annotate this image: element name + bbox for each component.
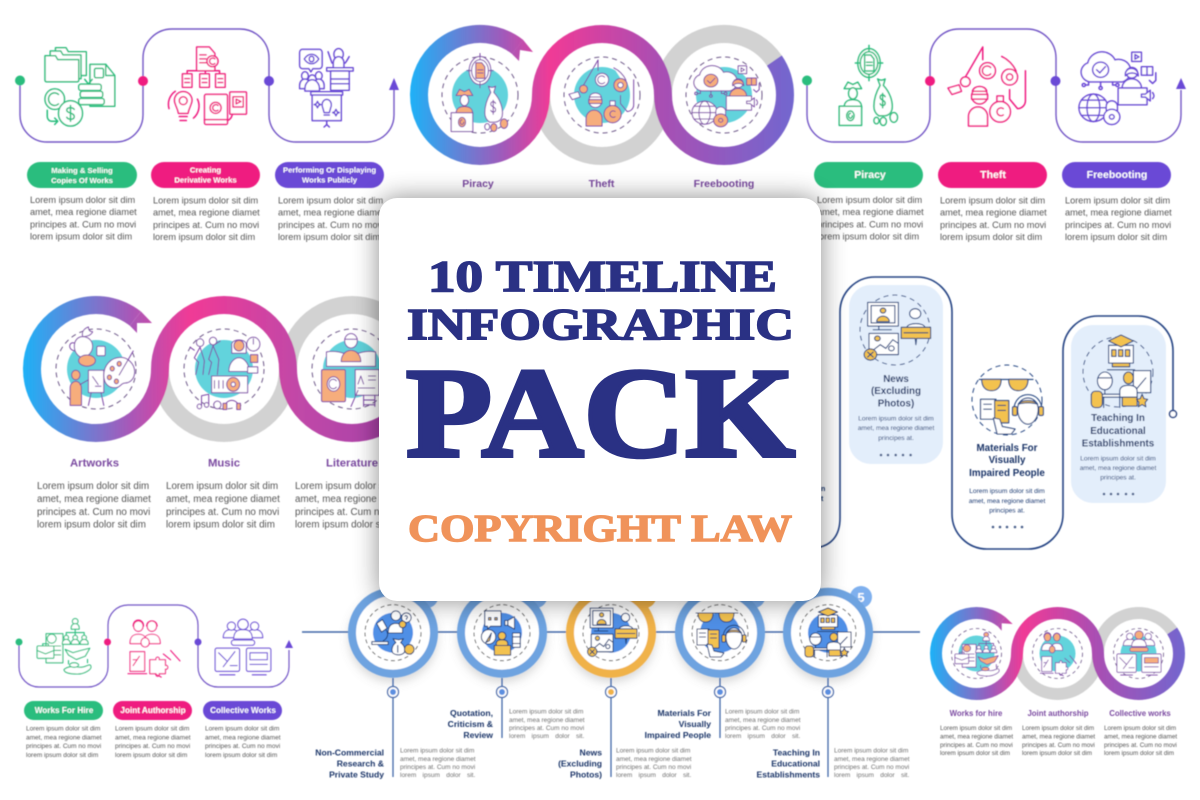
text block: column 2: principes at. Cum no movi bbox=[1022, 742, 1095, 749]
icon: joint authorship bbox=[1032, 628, 1082, 678]
label: collective works: Collective works bbox=[1109, 709, 1171, 718]
card: news: Lorem ipsum dolor sit dim bbox=[858, 416, 934, 422]
card: teaching in educational establishments: Teaching In bbox=[1091, 413, 1145, 424]
icon: derivative works bbox=[168, 47, 246, 124]
step 5: teaching in educational establishments bbox=[756, 586, 910, 780]
icon: collective works bbox=[215, 619, 271, 675]
text block: column 2: lorem ipsum dolor sit dim bbox=[115, 752, 187, 759]
icon: music bbox=[184, 329, 264, 409]
text block: column 1: principes at. Cum no movi bbox=[30, 219, 136, 229]
text block: column 2: lorem ipsum dolor sit dim bbox=[1022, 750, 1092, 757]
subtitle: copyright law: COPYRIGHT LAW bbox=[408, 508, 792, 550]
step 2: quotation, criticism and review: Lorem ipsum dolor sit dim bbox=[509, 708, 583, 716]
label: collective works: Collective Works bbox=[210, 706, 276, 715]
label: creating derivative works: Derivative Works bbox=[174, 176, 237, 184]
text block: column 1: amet, mea regione diamet bbox=[30, 207, 137, 217]
text block: column 2: Lorem ipsum dolor sit dim bbox=[940, 196, 1046, 206]
step 1: non-commercial research: Research & bbox=[337, 758, 384, 768]
card: teaching in educational establishments: principes at. bbox=[1100, 474, 1136, 482]
text block: column 1: lorem ipsum dolor sit dim bbox=[30, 232, 132, 242]
text block: column 2: principes at. Cum no movi bbox=[166, 507, 279, 518]
title line: infographic: INFOGRAPHIC bbox=[407, 300, 794, 349]
step 2: quotation, criticism and review: Quotation, bbox=[450, 708, 493, 718]
icon: copies of works bbox=[45, 48, 115, 126]
step 3: news: Photos) bbox=[570, 770, 602, 780]
label: piracy pill: Piracy bbox=[854, 169, 886, 181]
label: artworks: Artworks bbox=[70, 458, 119, 470]
step 1: non-commercial research: principes at. Cum no movi bbox=[400, 764, 475, 771]
text block: column 1: principes at. Cum no movi bbox=[37, 507, 150, 518]
step 3: news: amet, mea regione diamet bbox=[616, 756, 692, 763]
step 1: non-commercial research: Non-Commercial bbox=[315, 748, 384, 758]
text block: column 3: principes at. Cum no movi bbox=[1104, 742, 1177, 749]
label: collective works bbox=[203, 701, 282, 720]
title line: pack: PACK bbox=[406, 342, 795, 484]
label: joint authorship bbox=[113, 701, 192, 720]
text block: column 3: lorem ipsum dolor sit dim bbox=[205, 752, 277, 759]
step 4: materials for visually impaired people: lorem ipsum dolor sit. bbox=[725, 733, 800, 740]
text block: column 3: Lorem ipsum dolor sit dim bbox=[278, 196, 384, 206]
text block: column 1: amet, mea regione diamet bbox=[37, 494, 151, 505]
step 4: materials for visually impaired people: principes at. Cum no movi bbox=[725, 725, 800, 732]
icon: piracy line bbox=[839, 45, 898, 125]
icon: freebooting bbox=[686, 57, 762, 133]
text block: column 2: Lorem ipsum dolor sit dim bbox=[1022, 725, 1094, 732]
text block: column 2: Lorem ipsum dolor sit dim bbox=[115, 726, 189, 732]
label: joint authorship: Joint authorship bbox=[1027, 709, 1089, 718]
text block: column 2: principes at. Cum no movi bbox=[115, 743, 190, 750]
step 4: materials for visually impaired people bbox=[645, 586, 801, 740]
label: freebooting: Freebooting bbox=[694, 178, 754, 190]
text block: column 1: Lorem ipsum dolor sit dim bbox=[26, 726, 100, 732]
step 5: teaching in educational establishments: principes at. Cum no movi bbox=[834, 764, 909, 771]
text block: column 1: principes at. Cum no movi bbox=[26, 743, 101, 750]
clipped text fragment: n bbox=[821, 486, 825, 493]
label: creating derivative works bbox=[151, 162, 260, 188]
text block: column 2: amet, mea regione diamet bbox=[166, 494, 280, 505]
step 5: teaching in educational establishments: Educational bbox=[771, 758, 820, 768]
ribbon tail bbox=[130, 312, 152, 333]
text block: column 1: lorem ipsum dolor sit dim bbox=[817, 232, 919, 242]
panel: exclusive rights line timeline (top left) bbox=[15, 29, 399, 242]
text block: column 3: principes at. Cum no movi bbox=[295, 507, 408, 518]
step 4: materials for visually impaired people: Lorem ipsum dolor sit dim bbox=[725, 708, 799, 716]
text block: column 1: lorem ipsum dolor sit dim bbox=[37, 520, 146, 530]
icon: piracy bbox=[442, 53, 518, 133]
card: teaching in educational establishments: Lorem ipsum dolor sit dim bbox=[1080, 456, 1156, 462]
text block: column 3: Lorem ipsum dolor sit dim bbox=[205, 726, 279, 732]
step 2: quotation, criticism and review: lorem ipsum dolor sit. bbox=[509, 733, 584, 740]
text block: column 2: lorem ipsum dolor sit dim bbox=[166, 520, 275, 530]
text block: column 2: Lorem ipsum dolor sit dim bbox=[166, 481, 278, 492]
ribbon tail bbox=[512, 40, 533, 61]
text block: column 2: principes at. Cum no movi bbox=[153, 220, 259, 230]
step 2: quotation, criticism and review: Review bbox=[463, 730, 493, 740]
card: news: principes at. bbox=[878, 435, 914, 442]
text block: column 2: amet, mea regione diamet bbox=[1022, 733, 1095, 740]
label: works for hire: Works for hire bbox=[950, 709, 1003, 718]
panel: infringement ribbon loop (top centre) bbox=[419, 34, 785, 190]
label: joint authorship: Joint Authorship bbox=[120, 706, 186, 715]
label: creating derivative works: Creating bbox=[190, 166, 221, 174]
card: news: (Excluding bbox=[871, 386, 921, 397]
label: piracy: Piracy bbox=[462, 178, 494, 190]
ribbon: gradient band bbox=[936, 613, 1179, 694]
icon: works for hire bbox=[952, 628, 1002, 678]
step 2: quotation, criticism and review bbox=[448, 586, 585, 740]
label: theft pill: Theft bbox=[980, 169, 1006, 181]
text block: column 1: Lorem ipsum dolor sit dim bbox=[940, 725, 1012, 732]
card: materials for visually impaired people: amet, mea regione diamet bbox=[969, 498, 1045, 505]
ribbon: gradient band bbox=[32, 305, 416, 433]
text block: column 2: principes at. Cum no movi bbox=[940, 220, 1046, 230]
card: materials for visually impaired people: Impaired People bbox=[969, 468, 1045, 479]
label: works for hire: Works For Hire bbox=[35, 706, 94, 715]
step 3: news: principes at. Cum no movi bbox=[616, 764, 691, 771]
ribbon: grey track bbox=[541, 34, 774, 156]
text block: column 3: Lorem ipsum dolor sit dim bbox=[1065, 196, 1171, 206]
step 5: teaching in educational establishments: Teaching In bbox=[773, 748, 820, 758]
card: news: amet, mea regione diamet bbox=[858, 425, 934, 432]
step 3: news: lorem ipsum dolor sit. bbox=[616, 772, 691, 779]
label: theft: Theft bbox=[589, 178, 615, 190]
text block: column 1: principes at. Cum no movi bbox=[817, 219, 923, 229]
step 1: non-commercial research: amet, mea regione diamet bbox=[400, 756, 476, 763]
label: piracy pill bbox=[814, 162, 923, 188]
label: freebooting pill: Freebooting bbox=[1087, 169, 1147, 181]
label: works for hire bbox=[24, 701, 103, 720]
text block: column 3: amet, mea regione diamet bbox=[295, 494, 409, 505]
step 3: news: News bbox=[580, 748, 602, 758]
text block: column 1: principes at. Cum no movi bbox=[940, 742, 1013, 749]
step 2: quotation, criticism and review: Criticism & bbox=[448, 719, 493, 729]
icon: theft line bbox=[948, 47, 1025, 126]
ribbon tail bbox=[998, 617, 1013, 631]
step 3: news: (Excluding bbox=[558, 758, 602, 768]
icon: public performance bbox=[300, 49, 353, 127]
label: making and selling copies: Copies Of Works bbox=[51, 176, 113, 185]
label: music: Music bbox=[208, 458, 240, 470]
text block: column 3: lorem ipsum dolor sit dim bbox=[278, 232, 380, 242]
text block: column 2: amet, mea regione diamet bbox=[153, 208, 260, 218]
panel: horizontal circle timeline (bottom centre) bbox=[302, 586, 920, 780]
label: making and selling copies bbox=[27, 162, 137, 188]
text block: column 2: Lorem ipsum dolor sit dim bbox=[153, 196, 259, 206]
panel: infringement line timeline (top right) bbox=[802, 29, 1186, 242]
card: materials for visually impaired people: principes at. bbox=[989, 508, 1025, 514]
text block: column 1: amet, mea regione diamet bbox=[26, 734, 102, 741]
card: news: Photos) bbox=[878, 398, 914, 410]
step 1: non-commercial research: lorem ipsum dolor sit. bbox=[400, 772, 475, 779]
step 1: non-commercial research: Private Study bbox=[329, 770, 384, 780]
text block: column 3: lorem ipsum dolor sit dim bbox=[295, 520, 404, 530]
panel: authorship line timeline (bottom left) bbox=[16, 605, 293, 759]
icon: joint authorship bbox=[128, 620, 180, 677]
icon: literature bbox=[312, 329, 392, 409]
ribbon: grey track bbox=[160, 305, 416, 433]
text block: column 2: lorem ipsum dolor sit dim bbox=[153, 232, 255, 242]
panel: authorship ribbon loop (bottom right) bbox=[936, 613, 1179, 757]
text block: column 1: lorem ipsum dolor sit dim bbox=[26, 752, 98, 759]
connector outline bbox=[815, 277, 1176, 549]
text block: column 2: lorem ipsum dolor sit dim bbox=[940, 232, 1042, 242]
icon: collective works bbox=[1114, 628, 1164, 678]
panel: protected works ribbon loop (middle left) bbox=[32, 305, 416, 530]
text block: column 3: principes at. Cum no movi bbox=[278, 220, 384, 230]
text block: column 2: amet, mea regione diamet bbox=[115, 734, 191, 741]
label: literature: Literature bbox=[326, 458, 378, 470]
step 1: non-commercial research: Lorem ipsum dolor sit dim bbox=[400, 748, 474, 754]
text block: column 1: amet, mea regione diamet bbox=[817, 207, 924, 217]
title line: 10 timeline: 10 TIMELINE bbox=[428, 252, 777, 301]
step 5: teaching in educational establishments: 5 bbox=[857, 590, 865, 605]
text block: column 3: amet, mea regione diamet bbox=[1104, 733, 1177, 740]
connector line with arrow bbox=[16, 605, 293, 687]
connector line with arrow bbox=[802, 29, 1186, 142]
card shadow bbox=[379, 198, 821, 601]
step 5: teaching in educational establishments: amet, mea regione diamet bbox=[834, 756, 910, 763]
text block: column 1: Lorem ipsum dolor sit dim bbox=[817, 195, 923, 205]
icon: freebooting line bbox=[1079, 52, 1156, 124]
step 2: quotation, criticism and review: principes at. Cum no movi bbox=[509, 725, 584, 732]
icon: works for hire bbox=[37, 619, 91, 674]
text block: column 3: Lorem ipsum dolor sit dim bbox=[1104, 725, 1176, 732]
label: theft pill bbox=[938, 162, 1047, 188]
card: materials for visually impaired people bbox=[969, 365, 1045, 528]
card: materials for visually impaired people: Materials For bbox=[977, 443, 1038, 454]
text block: column 3: lorem ipsum dolor sit dim bbox=[1104, 750, 1174, 757]
card: materials for visually impaired people: Lorem ipsum dolor sit dim bbox=[969, 488, 1045, 495]
step 4: materials for visually impaired people: Materials For bbox=[658, 708, 712, 718]
label: making and selling copies: Making & Selling bbox=[51, 166, 113, 175]
step 4: materials for visually impaired people: amet, mea regione diamet bbox=[725, 717, 801, 724]
icon: artworks bbox=[56, 327, 136, 409]
text block: column 3: amet, mea regione diamet bbox=[278, 208, 385, 218]
card: teaching in educational establishments bbox=[1071, 325, 1166, 503]
text block: column 3: lorem ipsum dolor sit dim bbox=[1065, 232, 1167, 242]
text block: column 1: lorem ipsum dolor sit dim bbox=[940, 750, 1010, 757]
title card bbox=[379, 198, 821, 601]
ribbon: gradient band bbox=[419, 34, 785, 156]
text block: column 3: amet, mea regione diamet bbox=[1065, 208, 1172, 218]
text block: column 3: principes at. Cum no movi bbox=[205, 743, 280, 750]
card: news bbox=[849, 285, 943, 464]
card: news: News bbox=[883, 374, 909, 385]
panel: rounded vertical timeline (middle right) bbox=[815, 277, 1176, 549]
text block: column 3: principes at. Cum no movi bbox=[1065, 220, 1171, 230]
label: performing or displaying: Performing Or Displaying bbox=[283, 166, 376, 174]
ribbon: grey track bbox=[1017, 613, 1172, 694]
timeline axis bbox=[302, 631, 920, 633]
card: teaching in educational establishments: Establishments bbox=[1082, 438, 1155, 450]
text block: column 1: Lorem ipsum dolor sit dim bbox=[30, 195, 136, 205]
step 5: teaching in educational establishments: Establishments bbox=[756, 770, 820, 780]
card: materials for visually impaired people: Visually bbox=[989, 455, 1026, 466]
text block: column 2: amet, mea regione diamet bbox=[940, 208, 1047, 218]
card: teaching in educational establishments: amet, mea regione diamet bbox=[1080, 465, 1156, 472]
clipped text fragment: t bbox=[821, 496, 824, 503]
text block: column 3: amet, mea regione diamet bbox=[205, 734, 281, 741]
label: performing or displaying: Works Publicly bbox=[302, 176, 358, 184]
label: performing or displaying bbox=[275, 162, 384, 188]
connector line with arrow bbox=[15, 29, 399, 142]
card: teaching in educational establishments: Educational bbox=[1090, 426, 1146, 437]
step 1: non-commercial research bbox=[315, 586, 476, 780]
step 3: news bbox=[558, 586, 692, 780]
step 4: materials for visually impaired people: Impaired People bbox=[645, 730, 711, 740]
text block: column 1: Lorem ipsum dolor sit dim bbox=[37, 481, 149, 492]
step 3: news: Lorem ipsum dolor sit dim bbox=[616, 748, 690, 754]
text block: column 1: amet, mea regione diamet bbox=[940, 733, 1013, 740]
label: freebooting pill bbox=[1062, 162, 1171, 188]
text block: column 3: Lorem ipsum dolor sit dim bbox=[295, 481, 407, 492]
step 4: materials for visually impaired people: Visually bbox=[679, 719, 711, 729]
step 5: teaching in educational establishments: Lorem ipsum dolor sit dim bbox=[834, 748, 908, 754]
step 5: teaching in educational establishments: lorem ipsum dolor sit. bbox=[834, 772, 909, 779]
icon: theft bbox=[564, 57, 640, 133]
step 2: quotation, criticism and review: amet, mea regione diamet bbox=[509, 717, 585, 724]
